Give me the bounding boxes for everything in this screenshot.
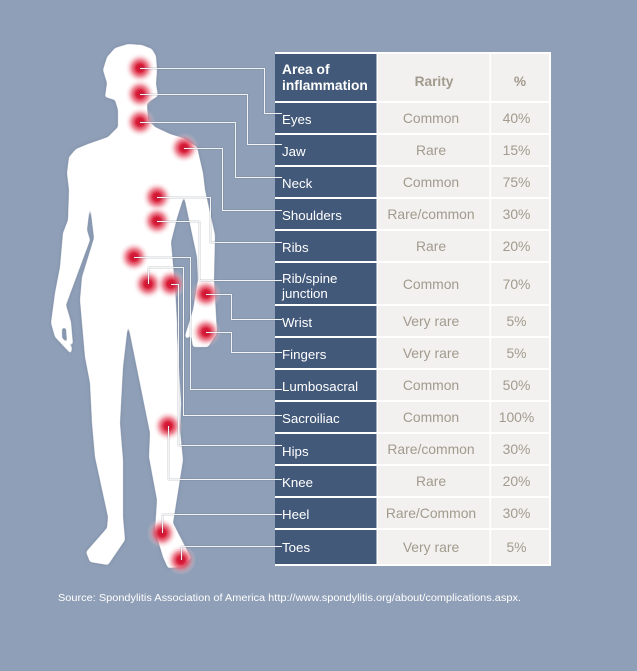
source note: Source: Spondylitis Association of America http://www.spondylitis.org/about/complications.aspx. <box>58 593 521 604</box>
row: ribs: Ribs <box>282 240 309 255</box>
row: heel: Heel <box>282 507 309 522</box>
row: lumbosacral: 50% <box>503 377 530 393</box>
row: heel: 30% <box>503 505 530 521</box>
row: neck <box>282 174 530 191</box>
table header: area: Area of <box>282 62 330 77</box>
row: shoulders: Rare/common <box>387 206 475 222</box>
row: eyes: Common <box>403 110 459 126</box>
row: lumbosacral: Lumbosacral <box>282 379 358 394</box>
row: fingers: Very rare <box>403 345 459 361</box>
row: jaw: Rare <box>416 142 446 158</box>
row: wrist <box>282 313 527 330</box>
row: jaw: Jaw <box>282 144 306 159</box>
row: toes: Toes <box>282 540 310 555</box>
row: knee <box>282 473 530 490</box>
table background <box>275 52 551 566</box>
table header: area line 2: inflammation <box>282 78 368 93</box>
row: hips <box>282 441 530 459</box>
row: neck: Neck <box>282 176 313 191</box>
row: shoulders: 30% <box>503 206 530 222</box>
row: ribs <box>282 238 530 255</box>
row: sacroiliac: 100% <box>499 409 534 425</box>
row: toes <box>282 539 527 555</box>
row: hips: Hips <box>282 444 309 459</box>
row: ribs: Rare <box>416 238 446 254</box>
row: neck: Common <box>403 174 459 190</box>
row: toes: Very rare <box>403 539 459 555</box>
row: sacroiliac <box>282 409 534 426</box>
row: heel: Rare/Common <box>386 505 476 521</box>
row: rib/spine junction <box>281 271 530 301</box>
row: rib/spine junction: Rib/spine <box>282 271 337 286</box>
row: sacroiliac: Sacroiliac <box>282 411 340 426</box>
row: wrist: 5% <box>506 313 527 329</box>
row: fingers: Fingers <box>282 347 327 362</box>
table header: percent: % <box>514 74 526 89</box>
connector lines <box>134 68 282 560</box>
row: shoulders <box>282 206 530 223</box>
row: lumbosacral: Common <box>403 377 459 393</box>
body silhouette <box>51 44 217 568</box>
row: toes: 5% <box>506 539 527 555</box>
table: area column <box>275 54 376 564</box>
row: hips: Rare/common <box>387 441 475 457</box>
row: eyes <box>282 110 530 127</box>
row: heel <box>282 505 530 522</box>
table: rarity and percent cells <box>378 54 549 564</box>
row: knee: Rare <box>416 473 446 489</box>
table header: rarity: Rarity <box>415 74 454 89</box>
row: rib/spine junction: junction <box>281 286 328 301</box>
row: eyes: 40% <box>503 110 530 126</box>
row: hips: 30% <box>503 441 530 457</box>
inflammation spots <box>119 53 221 575</box>
row: fingers <box>282 345 527 362</box>
row: jaw <box>282 142 530 159</box>
row: wrist: Very rare <box>403 313 459 329</box>
row: rib/spine junction: 70% <box>503 276 530 292</box>
row: eyes: Eyes <box>282 112 312 127</box>
row: shoulders: Shoulders <box>282 208 342 223</box>
row: sacroiliac: Common <box>403 409 459 425</box>
row: lumbosacral <box>282 377 530 394</box>
row: neck: 75% <box>503 174 530 190</box>
row: ribs: 20% <box>503 238 530 254</box>
row: rib/spine junction: Common <box>403 276 459 292</box>
row: fingers: 5% <box>506 345 527 361</box>
row: knee: 20% <box>503 473 530 489</box>
row: jaw: 15% <box>503 142 530 158</box>
row: wrist: Wrist <box>282 315 312 330</box>
row: knee: Knee <box>282 475 313 490</box>
